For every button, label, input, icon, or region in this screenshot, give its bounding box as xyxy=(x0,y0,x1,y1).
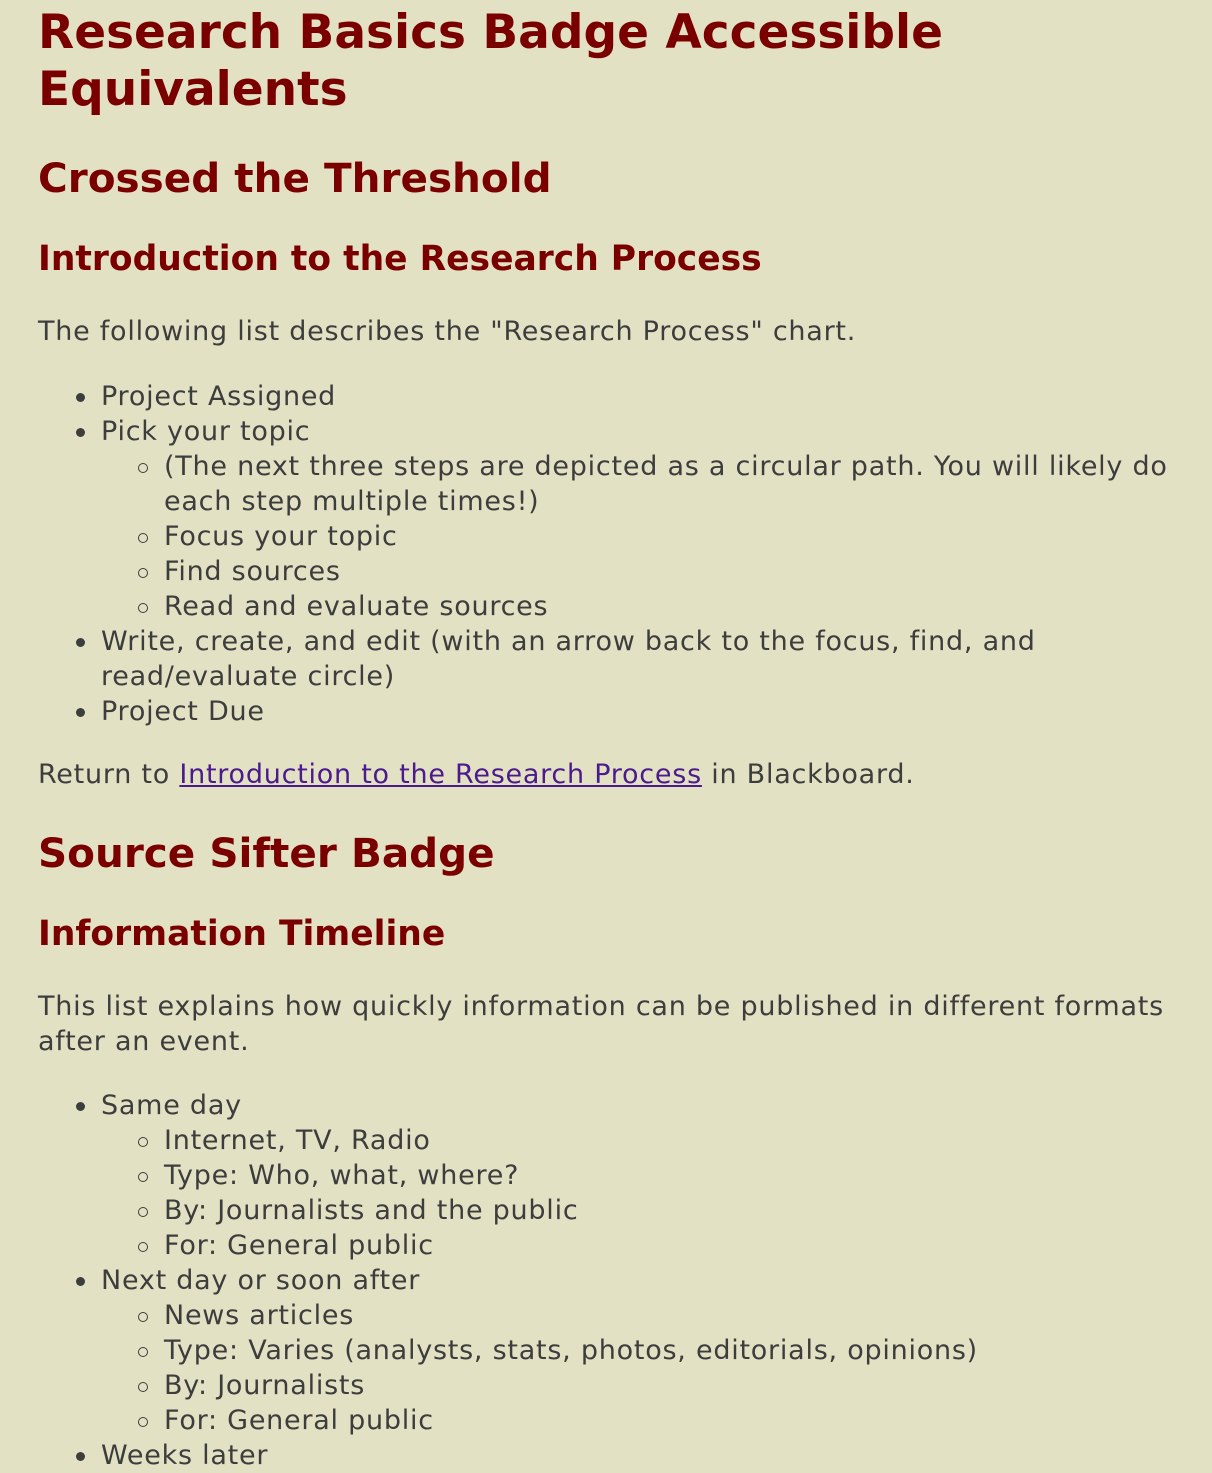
list: research process: read/evaluate circle) xyxy=(101,661,395,692)
list: information timeline: Type: Who, what, where? xyxy=(164,1160,519,1191)
text block: return link: Return to Introduction to the Research Process in Blackboard. xyxy=(38,759,915,790)
list: information timeline: By: Journalists and the public xyxy=(164,1195,578,1226)
subheading: Information Timeline: Information Timeline xyxy=(38,914,445,954)
list: research process: Project Assigned xyxy=(101,381,336,412)
list: information timeline: For: General public xyxy=(164,1405,434,1436)
list: research process: Write, create, and edit (with an arrow back to the focus, find, and xyxy=(101,626,1036,657)
list: research process: each step multiple times!) xyxy=(164,486,539,517)
list: research process: Pick your topic xyxy=(101,416,310,447)
heading: Source Sifter Badge: Source Sifter Badge xyxy=(38,829,495,877)
list: research process: Read and evaluate sources xyxy=(164,591,548,622)
list: information timeline: For: General public xyxy=(164,1230,434,1261)
title: Equivalents xyxy=(38,62,348,117)
list: information timeline: Weeks later xyxy=(101,1440,268,1471)
list: information timeline: Type: Varies (analysts, stats, photos, editorials, opinions) xyxy=(164,1335,978,1366)
list: information timeline: Same day xyxy=(101,1090,242,1121)
list: research process: Find sources xyxy=(164,556,341,587)
text block: timeline intro: This list explains how quickly information can be published in different formats xyxy=(38,991,1164,1022)
list: research process: Project Due xyxy=(101,696,265,727)
title: Research Basics Badge Accessible xyxy=(38,5,943,60)
list: information timeline: News articles xyxy=(164,1300,354,1331)
title xyxy=(38,5,943,117)
list: information timeline: Internet, TV, Radio xyxy=(164,1125,431,1156)
subheading: Introduction to the Research Process: Introduction to the Research Process xyxy=(38,239,762,279)
list: research process xyxy=(76,381,1168,727)
text block: timeline intro xyxy=(38,991,1164,1057)
list: information timeline xyxy=(76,1090,978,1471)
text block: intro: The following list describes the "Research Process" chart. xyxy=(38,316,856,347)
list: research process: (The next three steps are depicted as a circular path. You will likely do xyxy=(164,451,1168,482)
list: information timeline: Next day or soon after xyxy=(101,1265,420,1296)
heading: Crossed the Threshold: Crossed the Threshold xyxy=(38,154,552,202)
text block: timeline intro: after an event. xyxy=(38,1026,249,1057)
list: information timeline: By: Journalists xyxy=(164,1370,365,1401)
list: research process: Focus your topic xyxy=(164,521,398,552)
